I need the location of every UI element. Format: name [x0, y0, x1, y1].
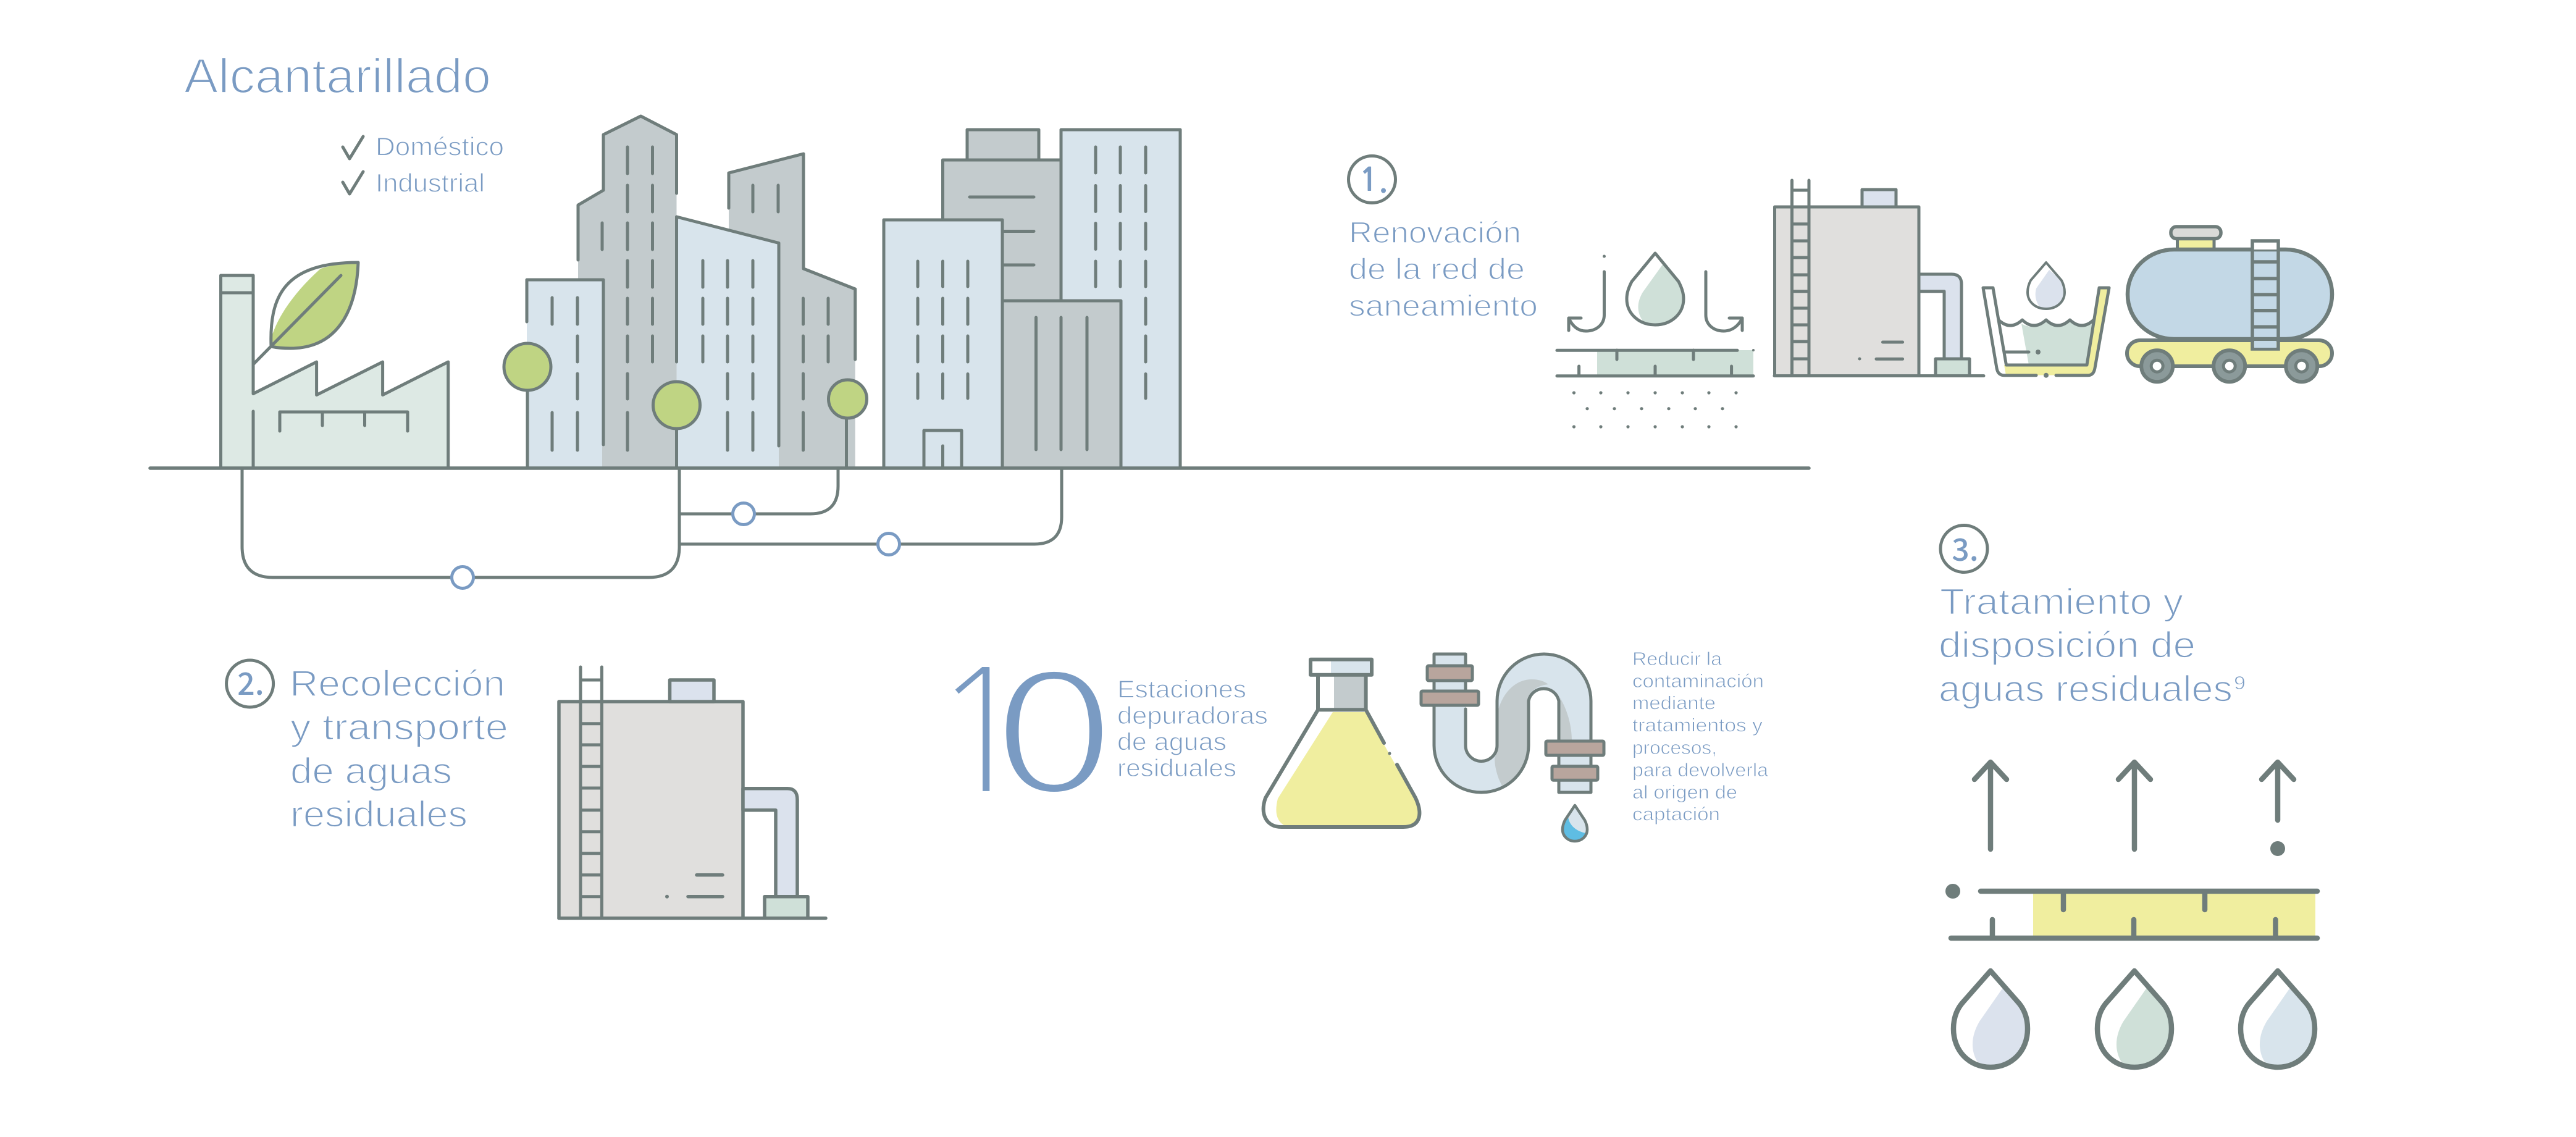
pipe slab — [1597, 350, 1753, 376]
step 2 text: de aguas — [290, 751, 452, 792]
checklist: sewage types — [343, 132, 504, 198]
drop 1 — [1953, 971, 2028, 1067]
stat caption: depuradoras — [1117, 702, 1268, 729]
stat: 10 stations — [928, 596, 1268, 842]
water drop — [1638, 264, 1684, 325]
wheels — [2141, 350, 2317, 382]
tree 1 — [504, 343, 551, 468]
city buildings left cluster — [504, 116, 867, 468]
arrow 1 — [1974, 762, 2007, 849]
label: doméstico: Doméstico — [375, 132, 504, 161]
slab fill — [2033, 891, 2315, 938]
icon: flask — [1264, 660, 1419, 827]
text: reduce contamination: contaminación — [1632, 670, 1764, 692]
step 3 text — [1939, 582, 2246, 709]
icon: treated water drops — [1953, 971, 2315, 1067]
tower: dark back right — [729, 154, 855, 468]
truck neck — [2178, 237, 2214, 250]
building: light middle — [677, 217, 779, 468]
clamps — [1421, 666, 1604, 780]
leaf outline and stem — [253, 262, 358, 364]
valve 2 — [732, 503, 755, 525]
icon: drain pipe — [1421, 654, 1604, 841]
step 1 text — [1349, 217, 1538, 322]
step 1 heading — [1349, 156, 1538, 322]
dark building — [942, 160, 1061, 308]
factory building — [221, 275, 448, 468]
tree 2 — [653, 382, 700, 468]
icon: network renovation — [1557, 253, 1755, 429]
big number: 1 — [928, 645, 1033, 818]
drop 3 — [2241, 971, 2315, 1067]
step 1 text: saneamiento — [1349, 290, 1538, 322]
yellow glass wall — [2004, 289, 2109, 376]
outlet pipe — [1919, 274, 1961, 359]
pipe outline — [1434, 654, 1591, 792]
step 3 text: aguas residuales — [1939, 668, 2233, 709]
text: reduce contamination: Reducir la — [1632, 648, 1722, 669]
soil dots — [1572, 391, 1738, 429]
arrow left — [1569, 272, 1605, 331]
leaf — [271, 262, 358, 348]
tank marks and ground — [559, 875, 826, 918]
number badge 2 — [227, 660, 274, 707]
outlet box — [1936, 359, 1970, 376]
icon: storage tank top row — [1774, 180, 1984, 376]
step 3 text: 9 — [2234, 672, 2246, 694]
check mark: industrial — [343, 172, 363, 194]
water — [2021, 320, 2094, 365]
check mark: doméstico — [343, 136, 363, 159]
tank — [2128, 250, 2332, 339]
front light building with door — [884, 220, 1002, 468]
flask outline — [1264, 660, 1419, 827]
stat caption: Estaciones — [1117, 676, 1246, 703]
step 2 text: y transporte — [290, 707, 508, 747]
underground sewer pipes — [242, 468, 1062, 588]
glass outline — [1983, 288, 2109, 376]
roof block — [967, 130, 1039, 160]
tank cap — [669, 680, 714, 702]
stat caption: residuales — [1117, 755, 1236, 782]
flask cap — [1331, 660, 1372, 675]
tree 3 — [829, 380, 867, 468]
flask neck — [1334, 675, 1366, 710]
falling drop — [2036, 270, 2065, 309]
number badge 1 — [1349, 156, 1396, 203]
front dark building — [1002, 301, 1121, 468]
truck lid — [2171, 227, 2221, 238]
pipe shadow — [1495, 679, 1548, 786]
ladder — [581, 667, 602, 918]
flask liquid — [1276, 712, 1418, 825]
icon: water glass — [1983, 262, 2109, 378]
step 2 text: Recolección — [290, 663, 505, 704]
pipe lines — [242, 468, 1062, 577]
factory outline — [221, 275, 448, 468]
text: reduce contamination: tratamientos y — [1632, 714, 1763, 736]
chassis — [2127, 340, 2332, 366]
text: reduce contamination: al origen de — [1632, 781, 1737, 803]
outlet box — [765, 897, 808, 918]
water surface — [1999, 320, 2094, 352]
tank cap — [1862, 190, 1896, 207]
building: light left — [527, 280, 602, 468]
tall light building — [1061, 130, 1180, 468]
slab lines — [1951, 891, 2317, 938]
icon: tanker truck — [2127, 227, 2332, 382]
icon: ground slab — [1945, 884, 2317, 938]
tank body — [1775, 207, 1919, 376]
pipe body — [1434, 654, 1591, 792]
number 1: 1. — [1359, 164, 1388, 196]
tower: dark tall — [578, 116, 677, 468]
icon: evaporation arrows — [1974, 762, 2294, 856]
step 2 text: residuales — [290, 794, 468, 835]
ground line — [150, 466, 1809, 470]
step 2 text — [290, 663, 508, 835]
step 1 text: de la red de — [1349, 253, 1525, 286]
big number: 0 — [991, 596, 1117, 842]
title: Alcantarillado — [184, 48, 491, 103]
city buildings right cluster — [884, 130, 1180, 468]
step 3 heading — [1939, 525, 2246, 709]
text: reduce contamination: procesos, — [1632, 737, 1717, 758]
ladder — [1792, 180, 1809, 376]
outflow drop — [1563, 805, 1587, 841]
number 2: 2. — [237, 660, 264, 704]
truck ladder top — [2252, 241, 2278, 250]
factory with leaf — [221, 262, 448, 468]
tank marks and ground — [1774, 342, 1984, 376]
text: reduce contamination: captación — [1632, 803, 1720, 825]
arrow right — [1706, 272, 1742, 331]
text: reduce contamination: mediante — [1632, 692, 1716, 714]
text: reduce contamination: para devolverla — [1632, 759, 1769, 781]
number 3: 3. — [1952, 526, 1979, 570]
tank body — [559, 702, 743, 918]
outlet pipe — [743, 789, 797, 897]
stat caption: de aguas — [1117, 729, 1227, 756]
step 2 heading — [227, 660, 508, 835]
label: industrial: Industrial — [375, 168, 485, 198]
arrow 2 — [2118, 762, 2150, 849]
step 3 text: Tratamiento y — [1940, 582, 2184, 623]
valve 1 — [452, 567, 473, 588]
text: reduce contamination — [1632, 648, 1769, 825]
number badge 3 — [1940, 525, 1987, 572]
drop 2 — [2097, 971, 2171, 1067]
valve 3 — [878, 534, 899, 555]
stat caption — [1117, 676, 1268, 782]
arrow 3 — [2262, 762, 2294, 820]
icon: storage tank step 2 — [559, 667, 826, 918]
big number — [928, 596, 1117, 842]
step 3 text: disposición de — [1939, 625, 2196, 666]
step 1 text: Renovación — [1349, 217, 1521, 250]
